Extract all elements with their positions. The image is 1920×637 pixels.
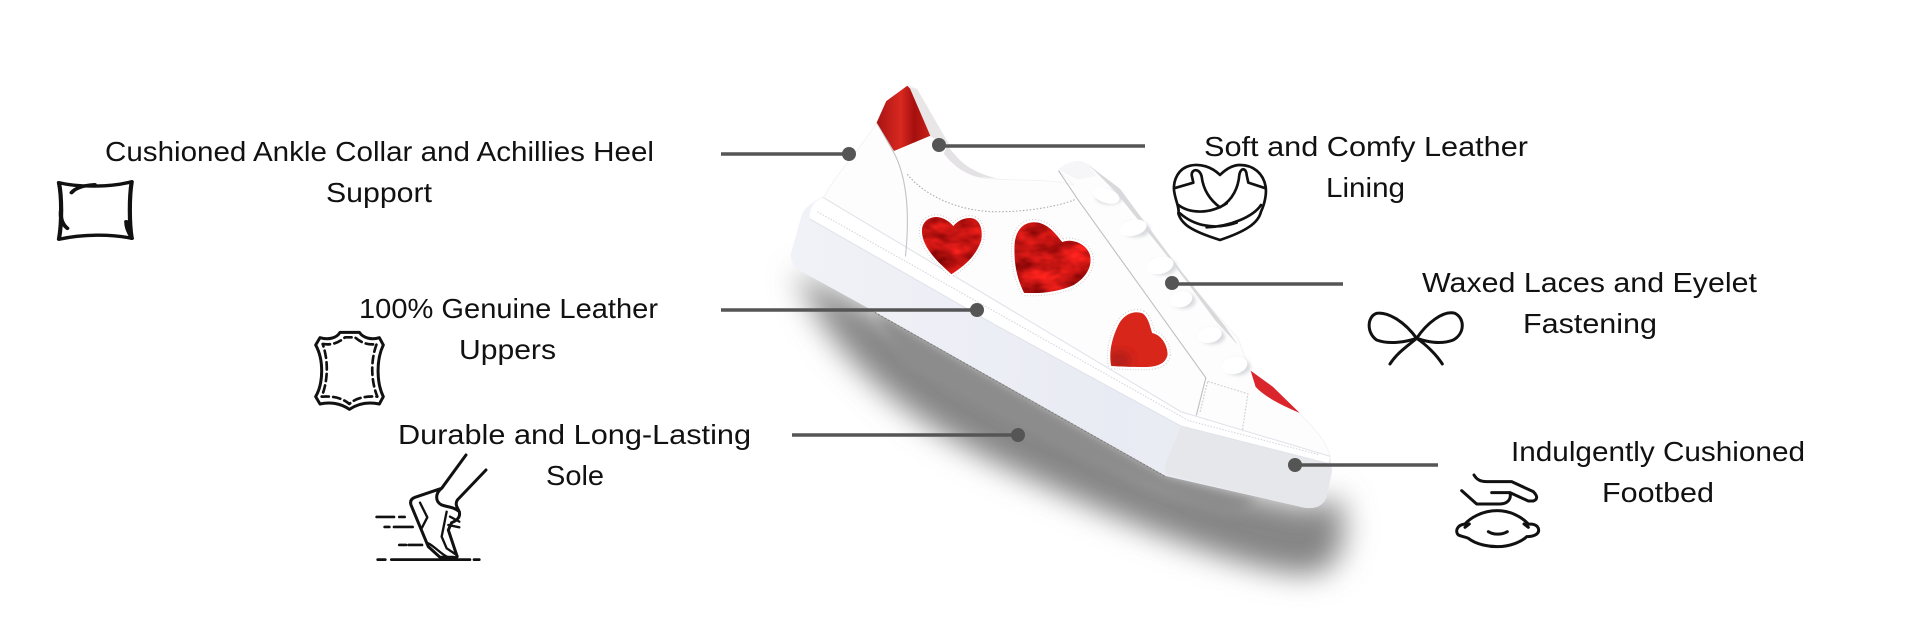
red heel tab	[877, 86, 949, 156]
label: Footbed	[1602, 477, 1714, 508]
callout: leather lining	[932, 131, 1528, 240]
label: Uppers	[459, 334, 556, 365]
label: Indulgently Cushioned	[1511, 436, 1805, 467]
cast shadow	[796, 271, 1344, 574]
icon: bow	[1369, 313, 1462, 364]
leader line	[1165, 276, 1343, 290]
upper leather	[810, 86, 1330, 464]
label: Support	[326, 177, 432, 208]
shoe illustration with cast shadow	[791, 86, 1344, 574]
tongue shading	[1089, 165, 1238, 346]
icon: hugging heart	[1174, 165, 1266, 240]
label: 100% Genuine Leather	[359, 293, 658, 324]
label: Fastening	[1523, 308, 1657, 339]
heart patch: middle	[1011, 219, 1095, 296]
icon: hand over cushion	[1457, 475, 1539, 547]
leader line	[721, 303, 984, 317]
leader line	[721, 147, 856, 161]
icon: leather hide	[316, 332, 383, 409]
icon: pillow	[59, 182, 132, 239]
label	[359, 293, 658, 365]
label	[398, 419, 751, 491]
label	[1511, 436, 1805, 508]
label: Cushioned Ankle Collar and Achillies Heel	[105, 136, 654, 167]
collar lining	[944, 146, 997, 179]
label: Soft and Comfy Leather	[1204, 131, 1528, 162]
leader line	[932, 138, 1145, 152]
callout: footbed	[1288, 436, 1805, 547]
label	[1422, 267, 1757, 339]
waxed laces	[1059, 162, 1251, 377]
callout: leather uppers	[316, 293, 984, 409]
leader line	[792, 428, 1025, 442]
red toe heart	[1251, 371, 1300, 413]
callout: durable sole	[377, 419, 1025, 560]
icon: running foot	[377, 455, 486, 560]
label	[1204, 131, 1528, 203]
label: Lining	[1326, 172, 1405, 203]
label	[105, 136, 654, 208]
label: Sole	[546, 460, 604, 491]
leader line	[1288, 458, 1438, 472]
callout: ankle collar	[59, 136, 856, 239]
label: Waxed Laces and Eyelet	[1422, 267, 1757, 298]
heart patch: rear	[917, 214, 986, 278]
callout: laces	[1165, 267, 1757, 364]
label: Durable and Long-Lasting	[398, 419, 751, 450]
heart patch: front	[1106, 308, 1171, 371]
outsole	[791, 201, 1332, 508]
